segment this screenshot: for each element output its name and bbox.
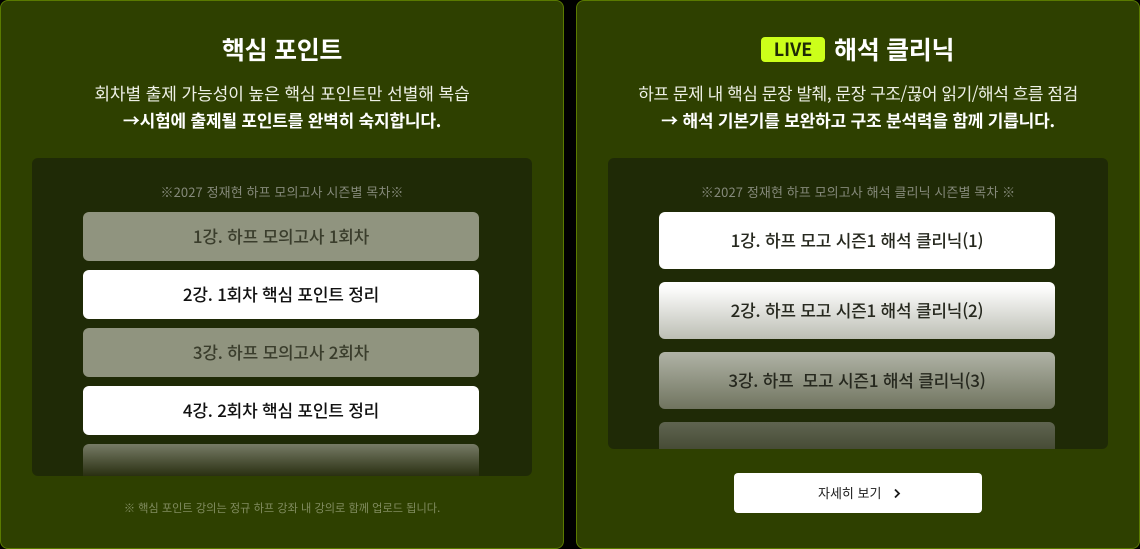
list item 3: 3강. 하프 모고 시즌1 해석 클리닉(3) (728, 367, 986, 392)
badge: LIVE (761, 37, 825, 62)
button label: 자세히 보기 (818, 483, 881, 502)
heading: live clinic (761, 31, 954, 67)
heading text: 해석 클리닉 (834, 31, 954, 67)
panel: live clinic contents list (608, 158, 1108, 449)
list item 3 (83, 328, 479, 377)
panel: live clinic (576, 0, 1140, 549)
list item 4: 4강. 2회차 핵심 포인트 정리 (183, 397, 379, 422)
heading: core points: 핵심 포인트 (222, 31, 342, 67)
list item 2: 2강. 1회차 핵심 포인트 정리 (183, 281, 379, 306)
list item 2: 2강. 하프 모고 시즌1 해석 클리닉(2) (731, 297, 983, 322)
list item 5 faded (83, 444, 479, 493)
list item 2 (83, 270, 479, 319)
caption: list title: ※2027 정재현 하프 모의고사 해석 클리닉 시즌별 목차 ※ (701, 182, 1015, 201)
list item 4 faded (659, 422, 1055, 479)
list item 4 (83, 386, 479, 435)
list item 1: 1강. 하프 모의고사 1회차 (193, 223, 369, 248)
list item 1 (659, 212, 1055, 269)
footnote: ※ 핵심 포인트 강의는 정규 하프 강좌 내 강의로 함께 업로드 됩니다. (124, 500, 440, 516)
panel: core points (0, 0, 564, 549)
badge: LIVE: LIVE (774, 36, 812, 62)
button: view details (734, 473, 982, 513)
panel: core points contents list (32, 158, 532, 476)
text: emphasized outcome: →시험에 출제될 포인트를 완벽히 숙지합니다. (123, 107, 441, 132)
list item 2 (659, 282, 1055, 339)
text: description line: 회차별 출제 가능성이 높은 핵심 포인트만 선별해 복습 (94, 80, 470, 105)
list item 3 (659, 352, 1055, 409)
text: emphasized outcome: → 해석 기본기를 보완하고 구조 분석력을 함께 기릅니다. (661, 107, 1055, 132)
list item 1: 1강. 하프 모고 시즌1 해석 클리닉(1) (731, 227, 983, 252)
icon: chevron right (894, 488, 900, 498)
text: description line: 하프 문제 내 핵심 문장 발췌, 문장 구조/끊어 읽기/해석 흐름 점검 (638, 80, 1078, 105)
list item 1 (83, 212, 479, 261)
caption: list title: ※2027 정재현 하프 모의고사 시즌별 목차※ (160, 182, 404, 201)
list item 3: 3강. 하프 모의고사 2회차 (193, 339, 369, 364)
